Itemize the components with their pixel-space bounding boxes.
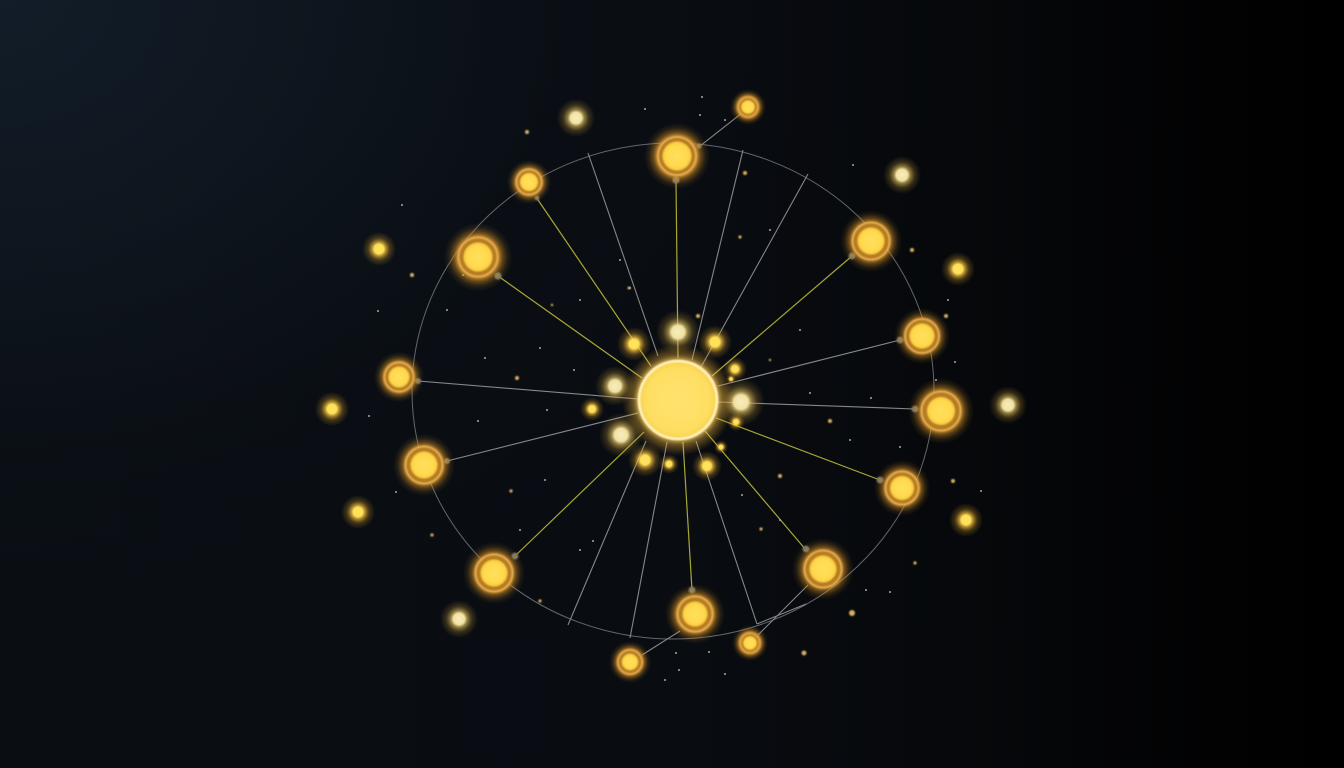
satellite node: top right bbox=[730, 89, 766, 125]
central sun bbox=[622, 344, 734, 456]
node: mid right bbox=[894, 308, 950, 364]
connector dots bbox=[415, 143, 918, 593]
node: lower right bbox=[874, 460, 930, 516]
node: upper left bbox=[444, 223, 512, 291]
inner orbit lights bbox=[580, 310, 765, 481]
satellite node: bottom left bbox=[609, 641, 651, 683]
small stars bbox=[368, 96, 982, 681]
outer orbit ring bbox=[412, 143, 934, 639]
yellow spokes bbox=[498, 180, 880, 590]
satellite node: bottom right bbox=[732, 625, 768, 661]
node: bottom left bbox=[463, 542, 525, 604]
warm sparkles bbox=[410, 130, 955, 655]
node: lower left bbox=[393, 434, 455, 496]
free floating outer lights bbox=[315, 99, 1027, 638]
node: left bbox=[374, 352, 424, 402]
node: bottom right bbox=[792, 538, 854, 600]
node: right bbox=[908, 378, 974, 444]
node: upper right bbox=[840, 210, 902, 272]
gray spokes bbox=[418, 113, 915, 655]
node: bottom bbox=[665, 584, 725, 644]
node: top bbox=[644, 123, 710, 189]
node: top left small bbox=[507, 160, 551, 204]
